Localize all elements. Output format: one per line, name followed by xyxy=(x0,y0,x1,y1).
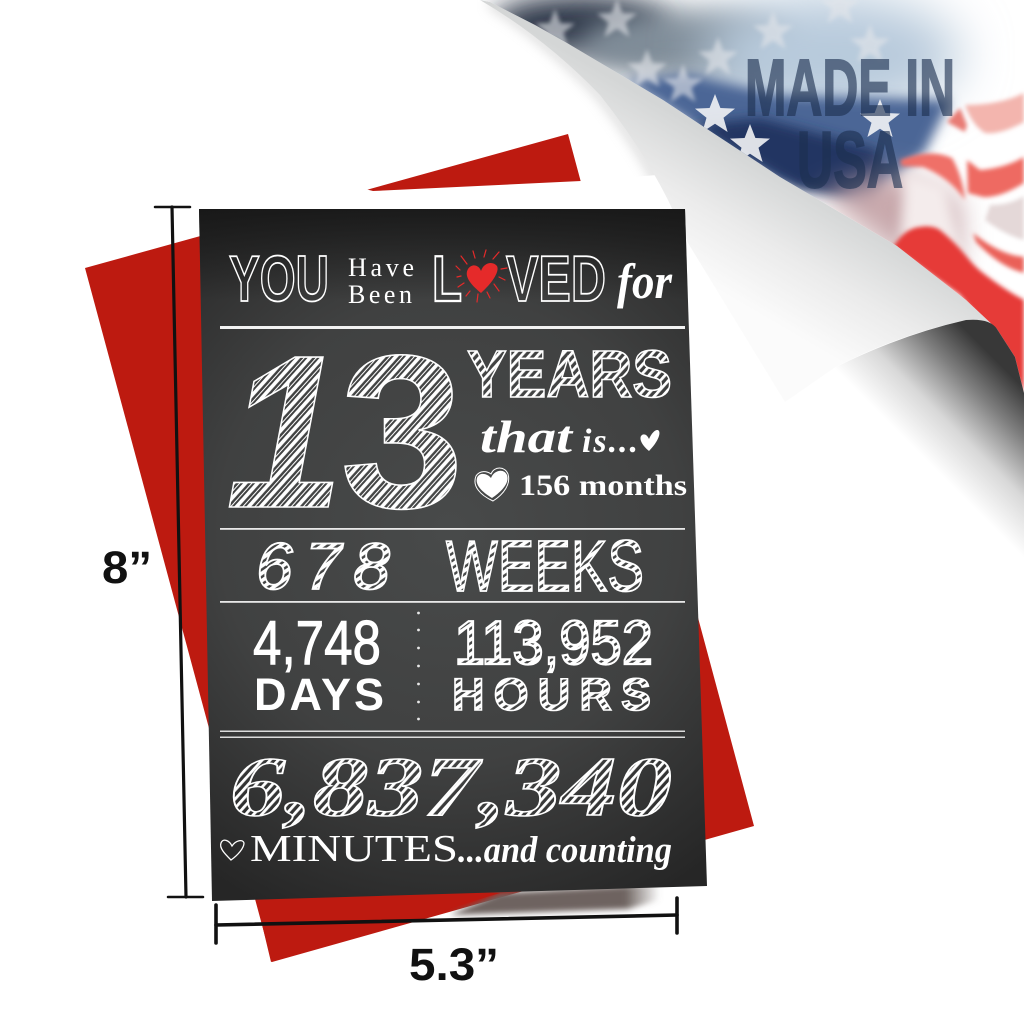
big number 13: 3 xyxy=(340,311,464,554)
icon: red heart with rays xyxy=(456,250,507,302)
badge: made in usa: USA xyxy=(797,115,903,204)
white backing sheet xyxy=(199,170,680,215)
fold soft shadow xyxy=(490,3,668,200)
big number 13: 1 xyxy=(226,311,344,554)
column: hours xyxy=(452,609,653,720)
label: 8 inches: 8” xyxy=(102,542,152,593)
heading: you have been loved for xyxy=(229,242,672,315)
text: Have Been: Been xyxy=(348,280,412,309)
script: for: for xyxy=(617,253,672,309)
page curl underside xyxy=(480,0,997,402)
icon: outline heart xyxy=(221,840,244,860)
label: 5.3 inches: 5.3” xyxy=(409,939,499,990)
word: HOURS: HOURS xyxy=(452,669,651,720)
double divider xyxy=(220,730,685,738)
card shadow xyxy=(450,884,660,915)
number: 4,748: 4,748 xyxy=(253,609,381,678)
number: 113,952: 113,952 xyxy=(454,609,653,678)
divider xyxy=(220,601,685,603)
chalkboard card xyxy=(199,209,707,901)
icon: small heart xyxy=(640,430,659,451)
text: 156 months: 156 months xyxy=(519,469,687,502)
number: 678: 678 xyxy=(256,529,390,603)
text: Have Been xyxy=(348,253,414,309)
big number 13 xyxy=(226,311,464,554)
word: WEEKS: WEEKS xyxy=(446,527,644,607)
badge: made in usa xyxy=(745,43,955,204)
height dimension line xyxy=(155,207,203,897)
word: YOU: YOU xyxy=(229,242,329,315)
script: that is: is... xyxy=(582,423,638,460)
word: DAYS: DAYS xyxy=(254,669,384,720)
script: that is: that xyxy=(480,411,573,462)
flag backdrop xyxy=(480,0,1024,400)
row: 678 weeks xyxy=(256,527,644,607)
text: minutes: MINUTES xyxy=(250,828,458,870)
word: YEARS: YEARS xyxy=(467,337,672,412)
icon: heart beside months xyxy=(475,468,509,501)
word: VED: VED xyxy=(506,242,606,315)
script: that is xyxy=(480,411,638,462)
script: and counting: ...and counting xyxy=(458,830,672,871)
word: L: L xyxy=(432,242,462,315)
red envelope corner over shadow xyxy=(255,893,500,962)
dotted separator xyxy=(417,612,420,720)
column: days xyxy=(253,609,384,720)
divider xyxy=(220,528,685,530)
divider xyxy=(220,326,685,329)
text: Have Been: Have xyxy=(348,253,414,282)
width dimension line xyxy=(216,898,677,943)
page curl shadow xyxy=(834,320,1024,560)
red envelope xyxy=(85,134,754,962)
number: 6,837,340: 6,837,340 xyxy=(230,740,672,834)
